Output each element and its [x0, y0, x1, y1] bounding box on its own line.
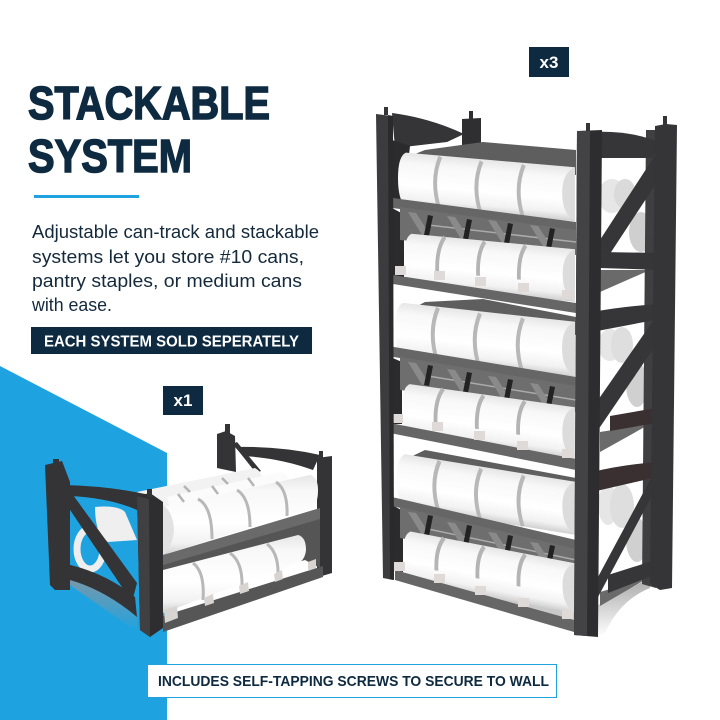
- quantity tag x1: x1: [174, 391, 192, 410]
- tier 2: lower rail: [390, 423, 576, 470]
- lower shelf rail: [163, 566, 323, 632]
- tier 1: top band: [400, 142, 576, 175]
- back right post: [650, 116, 677, 590]
- back centre post top: [462, 111, 481, 146]
- right side view cans: [598, 179, 653, 562]
- quantity tag x1: [163, 386, 203, 415]
- tier 2: upper cans: [395, 302, 575, 377]
- description text: [31, 221, 319, 315]
- tier 1: back panel and struts: [400, 207, 576, 255]
- left post: [376, 107, 394, 580]
- front corner post: [574, 123, 602, 637]
- description text: pantry staples, or medium cans: [32, 270, 302, 291]
- tier 3: back panel and struts: [400, 507, 576, 570]
- tier 3: lower rail: [395, 570, 574, 632]
- tier 2: upper rail: [388, 346, 576, 388]
- tier 1: upper rail: [392, 198, 576, 231]
- tier 2: lower cans: [402, 383, 575, 459]
- tier 3: upper rail: [392, 497, 576, 551]
- quantity tag x3: [529, 47, 569, 77]
- side view cans: [77, 507, 137, 569]
- illustration: three stacked racks: [376, 107, 677, 637]
- top beam left: [392, 113, 464, 148]
- tier 3: lower cans: [403, 530, 575, 613]
- tier 1: lower cans: [404, 233, 575, 302]
- can track clips: [392, 266, 573, 619]
- front left post, beams and brace: [45, 459, 150, 617]
- description text: systems let you store #10 cans,: [32, 246, 304, 267]
- back row cans: [137, 468, 262, 520]
- title: STACKABLE: [28, 77, 270, 129]
- tier 3: lower cans backing: [403, 570, 576, 622]
- badge: each system sold separately: [31, 327, 312, 354]
- description text: with ease.: [31, 294, 112, 315]
- back posts and top beam: [217, 424, 332, 576]
- title: SYSTEM: [28, 130, 192, 182]
- upper shelf rail: [163, 508, 320, 565]
- inner right column: [642, 130, 660, 588]
- tier 3: top band: [400, 450, 576, 495]
- upper cans: [163, 475, 318, 555]
- callout: includes screws: [148, 664, 556, 698]
- tier 1: upper cans: [398, 152, 575, 221]
- badge: each system sold separately: EACH SYSTEM SOLD SEPERATELY: [44, 334, 300, 350]
- tier 1: lower rail: [393, 275, 576, 313]
- lower cans: [163, 535, 306, 613]
- title: [28, 77, 270, 182]
- tier 3: upper cans: [397, 453, 575, 535]
- blue accent rule: [34, 195, 139, 198]
- panel between shelves: [163, 514, 320, 600]
- floor shadow: [598, 578, 650, 637]
- right side beams and braces: [592, 132, 665, 597]
- floor shadow: [70, 575, 137, 632]
- dark inner frame left of cans: [388, 140, 418, 572]
- tier 2: top band: [400, 299, 576, 335]
- blue background shape: [0, 366, 167, 720]
- quantity tag x3: x3: [540, 53, 558, 72]
- description text: Adjustable can-track and stackable: [32, 221, 319, 242]
- right side shelves: [600, 270, 650, 606]
- callout: includes screws: INCLUDES SELF-TAPPING SCREWS TO SECURE TO WALL: [158, 673, 549, 690]
- tier 2: back panel and struts: [400, 357, 576, 412]
- front corner post: [137, 489, 163, 637]
- illustration: single-unit rack: [45, 424, 332, 637]
- can track clips: [164, 559, 316, 623]
